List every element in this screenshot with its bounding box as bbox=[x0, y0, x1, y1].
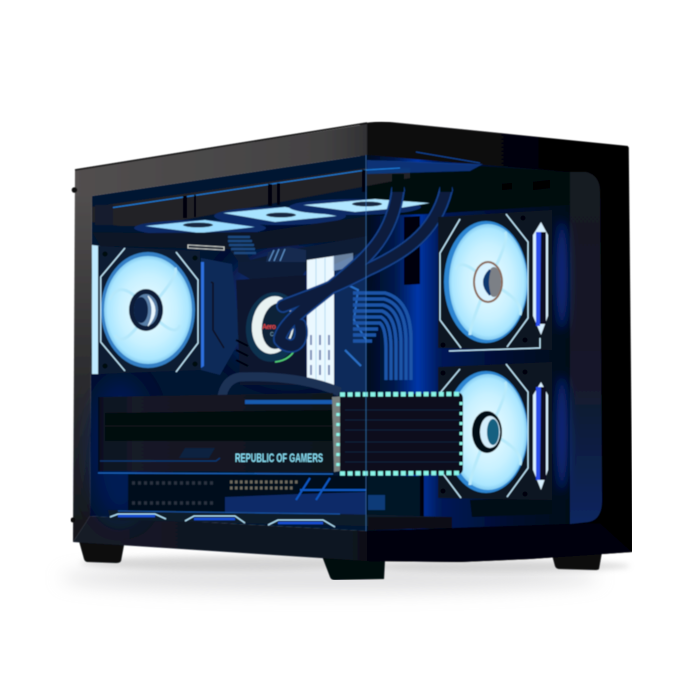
right board detail bbox=[333, 250, 366, 392]
bottom frame bbox=[73, 516, 367, 561]
RAM sticks bbox=[307, 253, 353, 385]
lower motherboard and slots bbox=[128, 474, 420, 517]
radiator housing bbox=[92, 168, 410, 226]
case body: left face frame bbox=[70, 123, 367, 561]
graphics card body bbox=[98, 393, 346, 474]
power cables bbox=[353, 293, 411, 380]
bottom fans and floor bbox=[108, 510, 452, 530]
case body: right face bbox=[360, 122, 632, 562]
top fan discs bbox=[134, 220, 266, 236]
front-panel base bbox=[367, 523, 632, 562]
interior background bbox=[90, 155, 570, 531]
right interior upper black panel bbox=[367, 160, 570, 216]
CPU pump head: Cool bbox=[270, 332, 280, 338]
lower light strip bbox=[533, 364, 549, 502]
honeycomb vents bbox=[95, 205, 113, 225]
VRM heatsink bbox=[238, 258, 306, 282]
glass corner seam bbox=[365, 155, 367, 531]
rear bar and PSU cable top bbox=[92, 216, 367, 278]
motherboard glow bbox=[220, 245, 360, 375]
floor shadow bbox=[60, 556, 630, 592]
blue glow beside strips bbox=[556, 220, 568, 491]
top radiator with fans bbox=[92, 152, 483, 236]
lower right dark band bbox=[470, 497, 552, 517]
tube fittings bbox=[392, 174, 452, 192]
whole case bbox=[70, 122, 632, 580]
dark cutouts bbox=[404, 216, 424, 520]
CPU pump head bbox=[241, 289, 305, 365]
motherboard area bbox=[201, 247, 366, 392]
upper front fan bbox=[438, 210, 552, 351]
outer right edge bbox=[628, 147, 632, 552]
I/O shield bbox=[201, 258, 240, 375]
GPU brand text: REPUBLIC OF GAMERS bbox=[235, 453, 323, 465]
GPU end plate bbox=[332, 396, 346, 472]
side screws bbox=[72, 187, 77, 193]
radiator ribs bbox=[183, 170, 366, 218]
GPU bracket LED block bbox=[338, 393, 463, 476]
top frame bbox=[75, 124, 367, 196]
coolant tubes bbox=[280, 174, 452, 346]
board bbox=[236, 275, 306, 385]
GPU power cable bbox=[221, 377, 340, 405]
upper light strip bbox=[533, 210, 549, 350]
right side inner panel bbox=[570, 172, 602, 524]
pump logo: Aero bbox=[262, 324, 276, 331]
feet bbox=[79, 541, 602, 580]
left pillar bbox=[73, 170, 92, 542]
lower front fan bbox=[438, 362, 552, 502]
rear slots bbox=[502, 180, 550, 190]
frame top edge bbox=[75, 123, 367, 170]
rear fan bbox=[92, 245, 201, 374]
